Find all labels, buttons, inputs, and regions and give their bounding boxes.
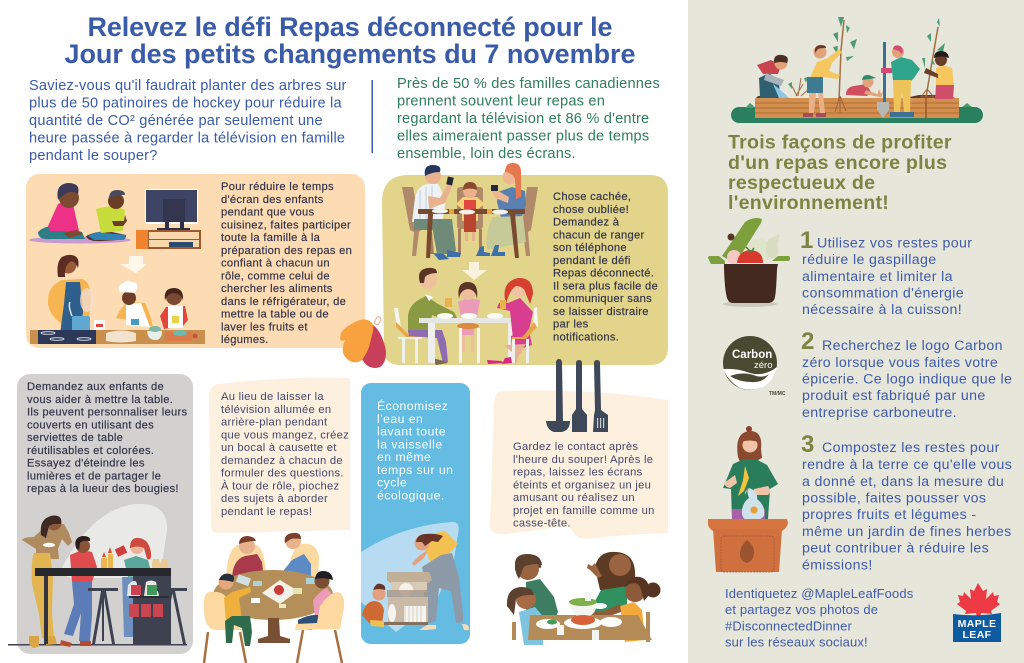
text: tip 2	[801, 328, 1012, 421]
text: tip 1: nécessaire à la cuisson!	[802, 302, 962, 318]
tree left	[839, 20, 844, 100]
illustration: family talking without phones	[394, 268, 538, 365]
text: tip 3: peut contribuer à réduire les	[802, 540, 989, 556]
text: tip 1: Utilisez vos restes pour	[817, 236, 972, 252]
tree right	[926, 27, 938, 97]
text: tip 3: Compostez les restes pour	[822, 440, 1000, 456]
crouching child	[846, 84, 871, 96]
text: amusant ou réalisez un	[513, 492, 635, 504]
text: tip 3	[801, 431, 1012, 574]
text: social media call to action: sur les réseaux sociaux!	[725, 634, 868, 650]
illustration: children on screens	[29, 181, 352, 346]
text: tip 1	[800, 227, 972, 318]
heading: d'un repas encore plus	[728, 152, 947, 174]
text: mettre la table ou de	[221, 309, 329, 321]
text: pendant le repas!	[221, 506, 312, 518]
panel: phones away	[382, 163, 668, 365]
text: que vous mangez, créez	[221, 429, 349, 441]
text: projet en famille comme un	[513, 505, 655, 517]
panel: eco dishwasher	[361, 383, 470, 644]
intro text: family statistics: prennent souvent leur repas en	[397, 94, 605, 110]
text: social media call to action: Identiquetez @MapleLeafFoods	[725, 586, 914, 601]
intro text: CO2 fact: pendant le souper?	[29, 148, 158, 164]
text: dans le réfrigérateur, de	[221, 296, 346, 308]
icon: woman composting	[708, 426, 788, 572]
intro text: family statistics: regardant la télévision et 86 % d'entre	[397, 111, 649, 127]
text: Pour réduire le temps	[221, 181, 334, 193]
arrow	[120, 256, 147, 273]
text: toute la famille à la	[221, 232, 321, 244]
text: tip 3: rendre à la terre ce qu'elle vous	[802, 457, 1012, 473]
person with tree	[810, 49, 842, 81]
illustration: candlelit table	[8, 504, 187, 648]
panel: sidebar background	[688, 0, 1024, 663]
text: cuisinez, faites participer	[221, 219, 351, 231]
text: confiant à chacun un	[221, 258, 330, 270]
text: demandez à chacun de	[221, 455, 343, 467]
icon: Maple Leaf logo: MAPLE	[958, 618, 996, 630]
text: légumes.	[221, 334, 269, 346]
panel: stay in touch after dinner	[490, 359, 668, 645]
title: Relevez le défi Repas déconnecté pour le	[88, 12, 612, 42]
text: cycle	[377, 476, 407, 490]
intro text: CO2 fact: Saviez-vous qu'il faudrait planter des arbres sur	[29, 78, 347, 94]
icon: television	[136, 189, 201, 249]
text: vous aider à mettre la table.	[27, 394, 173, 406]
text: l'heure du souper! Après le	[513, 454, 653, 466]
text: tip 3: 3	[801, 431, 814, 458]
intro text: CO2 fact: quantité de CO² générée par seulement une	[29, 113, 323, 129]
text: tip 2: Recherchez le logo Carbon	[822, 338, 1003, 354]
icon: Carbon zéro logo	[723, 336, 786, 397]
text: tip 2: entreprise carboneutre.	[802, 405, 957, 421]
text: rôle, comme celui de	[221, 270, 330, 282]
text: casse-tête.	[513, 518, 571, 530]
arrow	[462, 262, 487, 280]
text: social media call to action: et partagez vos photos de	[725, 602, 878, 617]
heading: respectueux de	[728, 172, 875, 194]
text: repas, laissez les écrans	[513, 466, 643, 478]
text: tip 3: propres fruits et légumes -	[802, 507, 977, 523]
text: Il sera plus facile de	[553, 280, 658, 292]
text: communiquer sans	[553, 293, 652, 305]
text: un bocal à causette et	[221, 442, 337, 454]
text: Ils peuvent personnaliser leurs	[27, 406, 188, 418]
panel: set the table	[8, 374, 193, 654]
intro text: family statistics: elles aimeraient passer plus de temps	[397, 128, 649, 144]
text: Demandez aux enfants de	[27, 381, 164, 393]
illustration: kitchen counter	[30, 326, 205, 344]
text: tip 3: émissions!	[802, 558, 873, 574]
title: Jour des petits changements du 7 novembre	[64, 39, 636, 69]
text: social media call to action: #DisconnectedDinner	[725, 618, 852, 634]
icon: pot of leftovers	[708, 218, 790, 307]
illustration: board game at table	[204, 533, 344, 663]
text: tip 2: zéro lorsque vous faites votre	[802, 355, 998, 371]
icon: Carbon zéro logo: Carbon	[732, 349, 772, 361]
text: serviettes de table	[27, 432, 123, 444]
text: tip 3: a donné et, dans la mesure du	[802, 474, 1004, 490]
illustration: family on phones at table	[402, 163, 538, 260]
text: Économisez	[377, 398, 448, 413]
text: Au lieu de laisser la	[221, 391, 324, 403]
intro text: CO2 fact: heure passée à regarder la télévision en famille	[29, 130, 345, 146]
illustration: family meal	[507, 552, 660, 645]
text: pendant que vous	[221, 206, 315, 218]
shovel	[883, 42, 886, 104]
text: Demandez à	[553, 216, 620, 228]
text: laver les fruits et	[221, 322, 308, 334]
heading: l'environnement!	[728, 192, 889, 214]
small plant	[792, 78, 811, 96]
text: se laisser distraire	[553, 306, 649, 318]
intro text: CO2 fact: plus de 50 patinoires de hockey pour réduire la	[29, 96, 343, 112]
illustration: washing dishes	[361, 522, 469, 632]
text: réutilisables et colorées.	[27, 445, 154, 457]
text: des sujets à aborder	[221, 493, 328, 505]
text: couverts en utilisant des	[27, 419, 154, 431]
text: tip 1: réduire le gaspillage	[802, 252, 937, 268]
text: éteints et organisez un jeu	[513, 479, 651, 491]
text: en même	[377, 450, 431, 464]
text: notifications.	[553, 332, 619, 344]
intro text: family statistics: Près de 50 % des familles canadiennes	[397, 76, 660, 92]
person watering	[759, 73, 780, 98]
text: Gardez le contact après	[513, 441, 638, 453]
person with shovel	[891, 57, 920, 81]
text: tip 1: 1	[800, 227, 813, 254]
text: tip 1: consommation d'énergie	[802, 286, 964, 302]
heading: Trois façons de profiter	[728, 132, 952, 154]
text: tip 2: produit est fabriqué par une	[802, 388, 986, 404]
text: arrière-plan pendant	[221, 416, 328, 428]
panel: conversation jar	[204, 378, 350, 663]
text: chacun de ranger	[553, 229, 645, 241]
text: préparation des repas en	[221, 245, 352, 257]
text: repas à la lueur des bougies!	[27, 483, 179, 495]
text: À tour de rôle, piochez	[221, 479, 340, 492]
text: écologique.	[377, 488, 445, 502]
text: temps sur un	[377, 463, 453, 477]
icon: oven mitts	[340, 317, 386, 368]
text: tip 3: possible, faites pousser vos	[802, 490, 986, 506]
icon: Maple Leaf logo: LEAF	[962, 629, 992, 641]
text: tip 3: même un jardin de fines herbes	[802, 524, 1012, 540]
illustration: family planting trees	[731, 17, 983, 123]
illustration: family cooking	[48, 255, 188, 339]
text: formuler des questions.	[221, 468, 344, 480]
icon: Carbon zéro logo: TM/MC	[769, 391, 786, 397]
text: d'écran des enfants	[221, 194, 324, 206]
text: chose oubliée!	[553, 204, 629, 216]
text: Repas déconnecté.	[553, 268, 654, 280]
text: tip 2: 2	[801, 328, 814, 355]
intro text: family statistics: ensemble, loin des écrans.	[397, 146, 576, 162]
text: tip 2: épicerie. Ce logo indique que le	[802, 372, 1012, 388]
text: par les	[553, 319, 589, 331]
text: pendant le défi	[553, 255, 631, 267]
text: lavant toute	[377, 424, 446, 438]
icon: Maple Leaf logo	[953, 583, 1001, 642]
text: télévision allumée en	[221, 404, 331, 416]
icon: Carbon zéro logo: zéro	[754, 360, 772, 371]
icon: kitchen utensils	[546, 359, 608, 432]
text: Essayez d'éteindre les	[27, 458, 145, 470]
text: la vaisselle	[377, 437, 443, 451]
person right	[936, 65, 954, 85]
text: lumières et de partager le	[27, 470, 161, 482]
text: l'eau en	[377, 412, 423, 426]
text: chercher les aliments	[221, 283, 333, 295]
text: son téléphone	[553, 242, 627, 254]
text: tip 1: alimentaire et limiter la	[802, 269, 953, 285]
divider	[372, 80, 373, 153]
text: Chose cachée,	[553, 191, 631, 203]
